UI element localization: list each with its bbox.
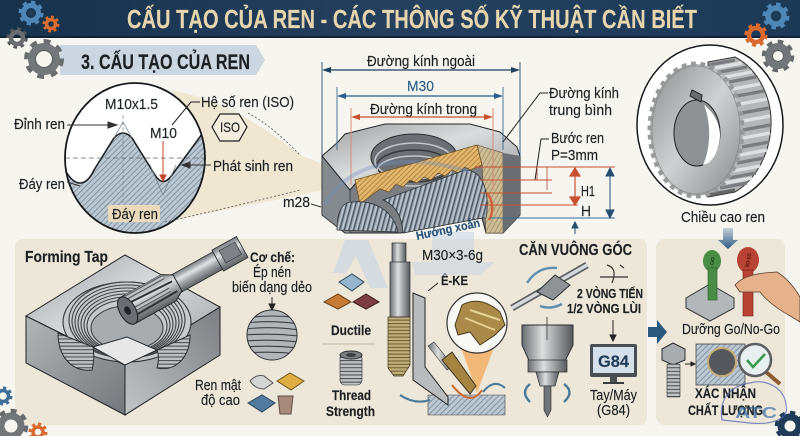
icon: G84 monitor (590, 344, 637, 384)
arrow to quality panel (648, 320, 667, 344)
label: hand or machine: (G84) (597, 403, 630, 419)
section heading: 3. CẤU TẠO CỦA REN (81, 50, 250, 74)
label: hand or machine (590, 388, 638, 419)
H1 arrow (570, 168, 580, 205)
red arrow M10 (160, 141, 166, 181)
label: ductile: Ductile (331, 322, 371, 338)
label: quality confirmation (688, 384, 763, 418)
label: Đỉnh ren (14, 117, 117, 133)
nut top face (322, 124, 520, 190)
label: quality confirmation: XÁC NHẬN (695, 384, 756, 401)
label: mechanism: Cơ chế: (250, 249, 295, 265)
label: mechanism: Ép nén (253, 264, 291, 281)
forming tap tool (113, 234, 249, 328)
dimension: inner diameter (351, 102, 493, 190)
label: 1/2 vòng lùi: 1/2 VÒNG LÙI (567, 301, 641, 316)
right beige section (477, 145, 503, 233)
gear circle (637, 45, 783, 205)
threaded cutaway (383, 170, 487, 233)
label: high density thread: Ren mật (195, 378, 241, 394)
label: Phát sinh ren (182, 159, 293, 175)
icon: red no-go gauge: NO-GO (745, 253, 753, 268)
icon: go gauge block (686, 284, 734, 321)
cone (462, 350, 493, 393)
icon: rotation symbol (600, 265, 628, 283)
label: Hệ số ren (172, 95, 294, 125)
red-orange thread arc (487, 193, 492, 220)
threaded block (26, 255, 220, 415)
label: thread strength (326, 387, 375, 419)
label: thread height: Chiều cao ren (681, 210, 765, 226)
label: Hệ số ren: Hệ số ren (ISO) (201, 95, 294, 111)
right H arrow (606, 168, 614, 218)
icon: material samples (248, 373, 304, 414)
label: helix direction: Hướng xoắn (415, 215, 481, 243)
icon: bolt (662, 343, 685, 397)
label: H1: H1 (581, 184, 595, 200)
label: mean diameter: trung bình (549, 103, 612, 119)
label: high density thread (195, 378, 241, 409)
dimension: outer diameter: Đường kính ngoài (367, 54, 475, 70)
thread height dimension lines (475, 167, 615, 234)
gear bore (674, 100, 720, 166)
icon: ISO hexagon (212, 114, 247, 141)
watermark: center logo (325, 162, 495, 288)
icon: hatched nut section (696, 344, 745, 385)
icon: green go gauge (703, 250, 721, 300)
gear keyway (690, 90, 702, 102)
icon: ISO hexagon: ISO (220, 119, 240, 135)
slanted tap (428, 342, 482, 398)
label: Ê-KE: Ê-KE (441, 273, 468, 288)
label: mean diameter (503, 86, 619, 142)
label: mechanism: biến dạng dẻo (232, 280, 312, 296)
magnifier circle (447, 293, 507, 353)
dimension: M30 (337, 79, 503, 150)
watermark: bottom-right logo: ATC (735, 405, 778, 422)
label: Đáy ren left: Đáy ren (19, 177, 65, 193)
gear bottom-right (777, 413, 800, 436)
hatched plate (428, 395, 505, 415)
label: M10: M10 (150, 126, 177, 142)
icon: red no-go gauge (737, 247, 759, 316)
icon: tap wrench (512, 265, 587, 308)
icon: green go gauge: GO (709, 257, 717, 266)
panel: forming tap (15, 234, 395, 425)
label: thread pitch (535, 131, 604, 180)
label: hand or machine: Tay/Máy (590, 388, 638, 404)
label: 2 vòng tiến: 2 VÒNG TIẾN (577, 286, 643, 301)
icon: threaded ball (245, 310, 299, 360)
label: Dưỡng Go/No-Go: Dưỡng Go/No-Go (682, 322, 780, 338)
label: H: H (581, 204, 591, 220)
icon: hand (735, 272, 800, 322)
label: thread pitch: Bước ren (551, 131, 604, 147)
gear face teeth (650, 64, 742, 196)
label: m28: m28 (283, 195, 310, 211)
gears top-left (8, 2, 61, 76)
icon: ductile material blocks (324, 274, 379, 309)
label: high density thread: độ cao (201, 393, 240, 409)
section heading (60, 45, 265, 75)
dimension: M30: M30 (407, 79, 434, 95)
label: thread strength: Thread (332, 387, 371, 403)
icon: magnifier check (739, 344, 780, 384)
square tool (413, 293, 448, 405)
gears top-right (746, 4, 792, 70)
front corner piece (93, 337, 157, 365)
gear body side (708, 57, 771, 197)
dimension: outer diameter (322, 54, 520, 156)
label: mechanism (232, 249, 312, 310)
label: thread spec: M30×3-6g (422, 248, 483, 264)
gears bottom-left (0, 388, 46, 436)
curved arrows (400, 384, 505, 402)
header banner (0, 0, 800, 38)
nut cutaway (322, 124, 520, 233)
label: bottom Đáy ren: Đáy ren (112, 207, 158, 223)
watermark: bottom-right logo (721, 382, 787, 423)
panel: perpendicular alignment (388, 239, 647, 425)
label: thread strength: Strength (326, 403, 375, 419)
thread profile (67, 132, 204, 232)
lower threaded bore (337, 202, 398, 232)
nut side faces (322, 156, 520, 233)
label: quality confirmation: CHẤT LƯỢNG (688, 402, 763, 418)
heading: căn vuông góc: CĂN VUÔNG GÓC (519, 240, 632, 259)
label: M10x1.5: M10x1.5 (105, 97, 158, 113)
icon: G84 monitor: G84 (598, 352, 630, 371)
panel: go/no-go verification (656, 239, 800, 425)
label: Ê-KE (428, 273, 468, 291)
label: mean diameter: Đường kính (549, 86, 619, 102)
gold section (355, 145, 482, 204)
vertical tap (388, 243, 410, 376)
nut threaded hole (371, 134, 457, 186)
label: Phát sinh ren: Phát sinh ren (213, 159, 293, 175)
heading: Forming Tap: Forming Tap (25, 249, 108, 266)
icon: drill chuck (522, 317, 573, 417)
tan callout wedge (165, 90, 325, 222)
arrow down to gauges (718, 228, 738, 249)
label: Đỉnh ren: Đỉnh ren (14, 117, 65, 133)
icon: thread cylinder (340, 351, 362, 385)
panel: thread profile circle (60, 83, 205, 240)
dimension: inner diameter: Đường kính trong (370, 102, 477, 118)
small up arrow (572, 222, 578, 234)
label: thread pitch: P=3mm (551, 148, 598, 164)
dotted wedge edges (165, 113, 300, 222)
